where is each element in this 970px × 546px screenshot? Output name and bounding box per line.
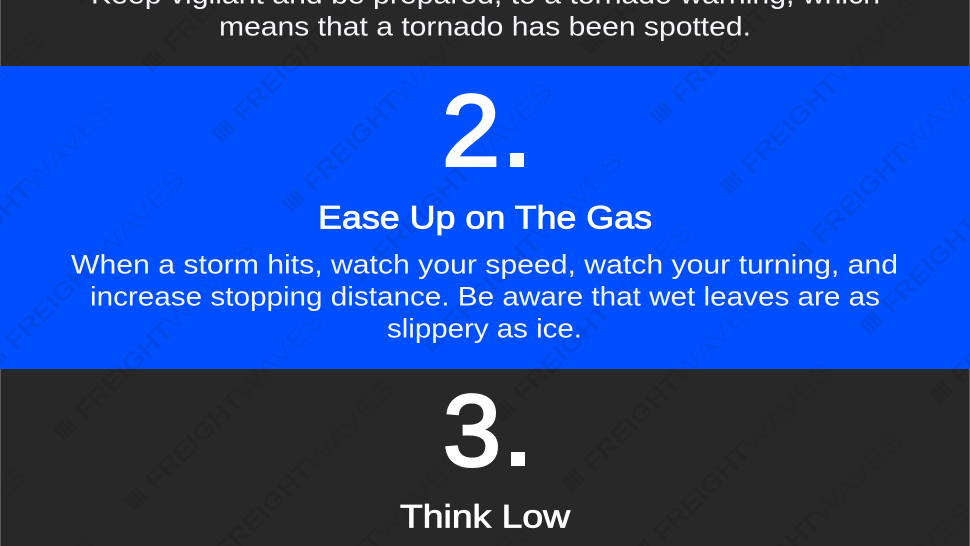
left edge line, top panel bbox=[0, 0, 1, 66]
text block: step 2 description: slippery as ice. bbox=[387, 314, 582, 344]
right edge line, top panel bbox=[969, 0, 970, 66]
text block: step 1 description: means that a tornado has been spotted. bbox=[219, 12, 751, 42]
panel: step 2 blue background bbox=[0, 66, 970, 369]
heading: Think Low: Think Low bbox=[400, 498, 571, 534]
text block: step 2 description: When a storm hits, watch your speed, watch your turning, and bbox=[71, 250, 898, 280]
left edge line, bottom panel bbox=[0, 369, 1, 546]
panel: step 3 dark background bbox=[0, 369, 970, 546]
number: 3.: 3 bbox=[443, 376, 501, 488]
right edge line, bottom panel bbox=[969, 369, 970, 546]
number: 2.: 2 bbox=[442, 76, 500, 188]
number: 2. bbox=[442, 76, 524, 188]
number: 3. bbox=[443, 376, 525, 488]
heading: Ease Up on The Gas: Ease Up on The Gas bbox=[318, 200, 652, 236]
panel: step 1 dark background bbox=[0, 0, 970, 66]
text block: step 1 description bbox=[91, 0, 880, 42]
text block: step 2 description bbox=[71, 250, 898, 344]
text block: step 2 description: increase stopping distance. Be aware that wet leaves are as bbox=[90, 282, 880, 312]
